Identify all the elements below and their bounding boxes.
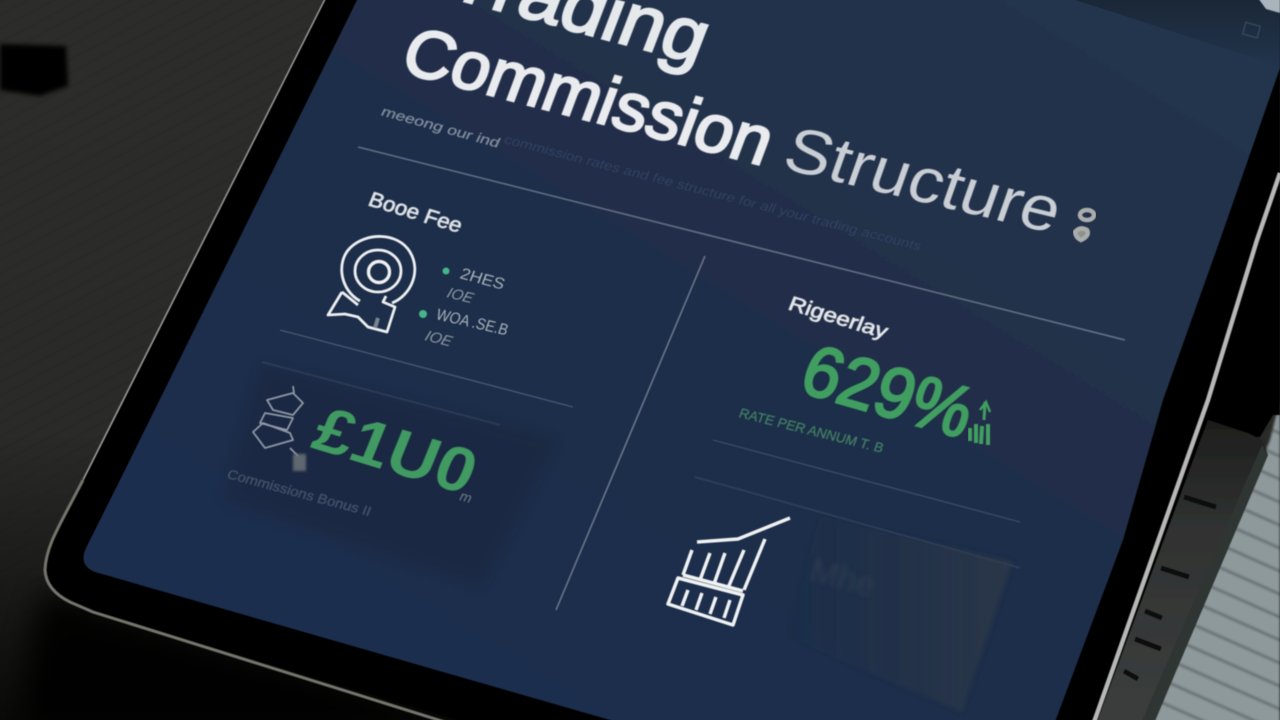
caption: percentage: RATE PER ANNUM T. B xyxy=(737,405,886,456)
desk object top left xyxy=(0,44,68,96)
icon: title dots xyxy=(1075,210,1094,240)
list: fee items: IOE xyxy=(445,285,477,307)
subtitle text: meeong our ind xyxy=(379,104,503,150)
screen top shadow band xyxy=(1060,0,1280,68)
title: Structure: Structure xyxy=(775,113,1072,247)
title: Commission: Commission xyxy=(393,14,784,179)
tablet upper left edge xyxy=(83,0,326,480)
heading: rate label: Rigeerlay xyxy=(785,293,891,343)
dark hinged case on right xyxy=(1093,170,1280,720)
caption: fixed fee: Commissions Bonus II xyxy=(225,466,374,519)
label: fixed fee unit: m xyxy=(458,488,474,506)
icon: target badge xyxy=(328,236,415,332)
icon: layered stack xyxy=(253,386,306,471)
icon: mini growth bars xyxy=(970,402,990,445)
tablet lower left edge xyxy=(45,480,445,720)
header dividers and section dividers xyxy=(262,147,1125,610)
heading: base fee: Booe Fee xyxy=(365,188,466,238)
list: fee items: WOA .SE.B xyxy=(434,306,511,339)
tablet right silver edge xyxy=(1093,173,1280,720)
stat: commission percentage: 629% xyxy=(792,331,984,453)
chart caption ghost: Mhe xyxy=(806,551,880,605)
panel: chart backdrop xyxy=(785,516,1012,712)
subtitle text xyxy=(379,104,925,254)
top right icon xyxy=(1243,0,1280,38)
icon: bar chart with trend xyxy=(668,518,790,625)
list: fee items: 2HES xyxy=(458,265,507,293)
tablet shadow on desk xyxy=(20,590,480,720)
list: fee items xyxy=(419,265,511,351)
subtitle text: commission rates and fee structure for all your trading accounts xyxy=(502,132,925,254)
list: fee items: IOE xyxy=(423,328,456,351)
striped surface bottom right xyxy=(1150,400,1280,720)
stat: fixed fee amount: £1U0 xyxy=(304,393,488,508)
panel: fixed fee value backdrop xyxy=(225,365,556,585)
